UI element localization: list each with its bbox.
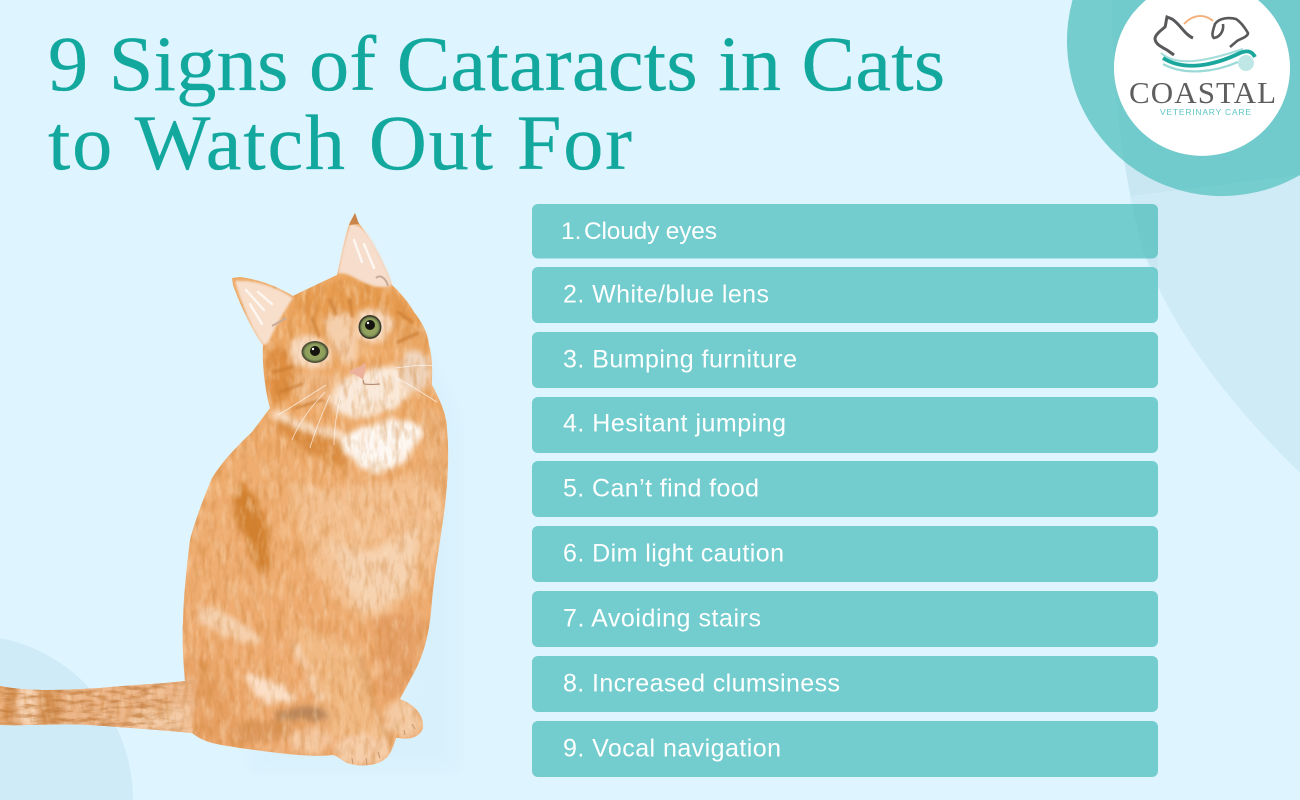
- hind foot: [236, 719, 291, 744]
- sign 9: [532, 721, 1158, 777]
- logo tagline: VETERINARY CARE: [1160, 107, 1251, 117]
- sign 8: [532, 656, 1158, 712]
- sign 5: [532, 461, 1158, 517]
- fur texture dark: [0, 280, 460, 770]
- muzzle: [326, 362, 413, 422]
- sign 1: Cloudy eyes: [584, 218, 717, 245]
- teal ring top right: [1067, 0, 1300, 196]
- right cheek: [401, 350, 431, 394]
- rear haunch: [185, 640, 240, 746]
- cream thigh patches: [198, 605, 262, 642]
- list of signs: [532, 204, 1158, 777]
- ear tip right: [349, 213, 359, 225]
- ear left: [235, 281, 293, 345]
- face base: [292, 368, 350, 402]
- sign 1: [532, 204, 1158, 258]
- ear right: [338, 224, 392, 287]
- chest cream: [290, 465, 446, 619]
- head stripes: [274, 300, 418, 408]
- pale neck band: [272, 408, 345, 438]
- nose: [349, 363, 366, 380]
- white chest: [340, 419, 422, 475]
- icon: sun arc: [1184, 16, 1213, 24]
- sign 9: 9. Vocal navigation: [563, 734, 781, 762]
- title: to Watch Out For: [48, 100, 632, 187]
- fur texture light: [0, 280, 460, 770]
- decorative circle right: [1112, 0, 1300, 473]
- tint where the circle overlaps teal shapes: [1112, 0, 1300, 273]
- tail fur texture: [0, 680, 192, 732]
- sign 4: [532, 397, 1158, 453]
- leg crease: [360, 655, 390, 742]
- title: 9 Signs of Cataracts in Cats: [48, 21, 945, 108]
- tail: [0, 676, 195, 738]
- ear shading: [246, 240, 374, 324]
- dark flank patch: [232, 482, 270, 578]
- icon: waves: [1161, 49, 1255, 71]
- sign 6: [532, 526, 1158, 582]
- eye right: [358, 315, 382, 339]
- mouth line: [363, 380, 380, 384]
- leg shadow: [272, 707, 328, 720]
- sign 8: 8. Increased clumsiness: [563, 670, 840, 698]
- chest right: [422, 418, 448, 489]
- cat silhouette: [0, 213, 448, 765]
- logo wordmark: COASTAL: [1129, 75, 1276, 110]
- rear legs: [373, 616, 422, 695]
- eye left: [302, 341, 328, 363]
- decorative circle bottom left: [0, 638, 133, 800]
- front leg: [292, 626, 382, 742]
- cat fur colouring: [0, 278, 460, 770]
- soft shadow behind cat: [250, 340, 458, 770]
- cat photo: [0, 213, 460, 770]
- sign 3: 3. Bumping furniture: [563, 346, 797, 374]
- left cheek orange: [264, 345, 298, 408]
- paw toes: [352, 724, 415, 765]
- sign 2: [532, 267, 1158, 323]
- logo badge: [1114, 0, 1290, 156]
- face and body detail: [198, 278, 447, 766]
- orange neck band: [274, 418, 345, 468]
- sign 2: 2. White/blue lens: [563, 280, 769, 308]
- hind paw: [288, 727, 332, 753]
- icon: cat outline: [1155, 17, 1193, 55]
- side face orange: [424, 327, 430, 346]
- sign 1: 1.: [561, 218, 581, 245]
- forehead orange: [296, 278, 424, 325]
- sign 7: 7. Avoiding stairs: [563, 604, 761, 632]
- front paw: [334, 734, 390, 766]
- sign 7: [532, 591, 1158, 647]
- icon: dog outline: [1212, 18, 1248, 47]
- whiskers: [278, 365, 437, 448]
- sign 5: 5. Can’t find food: [563, 474, 759, 502]
- rear paw: [385, 699, 423, 737]
- sign 6: 6. Dim light caution: [563, 540, 784, 568]
- sign 4: 4. Hesitant jumping: [563, 410, 786, 438]
- badge white circle: [1114, 0, 1290, 156]
- front leg highlight: [294, 642, 322, 702]
- title: [48, 21, 945, 187]
- pale face patches: [323, 312, 358, 368]
- sign 3: [532, 332, 1158, 388]
